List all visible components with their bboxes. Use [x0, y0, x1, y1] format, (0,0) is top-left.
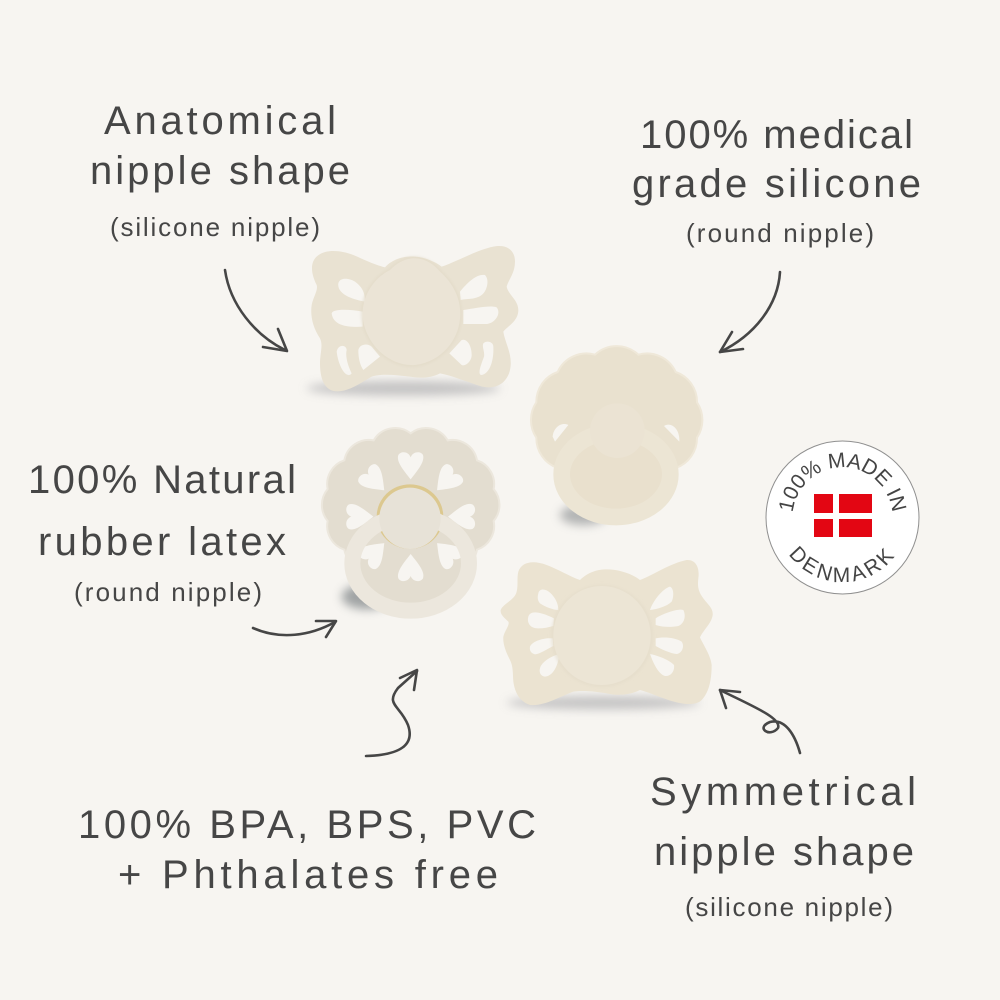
- label: anatomical nipple shape: [90, 99, 350, 242]
- left opening: [553, 424, 568, 442]
- badge top text: 100% MADE IN: [779, 452, 906, 511]
- pacifier: symmetrical wings: [501, 560, 713, 709]
- label: anatomical nipple shape: (silicone nipple): [110, 212, 320, 242]
- label: BPA free: + Phthalates free: [118, 853, 498, 897]
- label: symmetrical nipple shape: [650, 770, 916, 922]
- pacifier: scalloped silicone: [531, 346, 702, 525]
- label: anatomical nipple shape: nipple shape: [90, 149, 350, 193]
- badge: made in Denmark: [766, 440, 920, 594]
- label: anatomical nipple shape: Anatomical: [104, 99, 336, 143]
- label: symmetrical nipple shape: nipple shape: [654, 830, 914, 874]
- label: medical grade silicone: grade silicone: [632, 162, 921, 206]
- label: natural rubber latex: 100% Natural: [28, 458, 296, 502]
- badge bottom text: DENMARK: [789, 546, 895, 582]
- label: symmetrical nipple shape: (silicone nipple): [685, 892, 893, 922]
- arrow: to anatomical pacifier: [225, 270, 287, 351]
- pacifier: latex with hearts: [322, 428, 499, 611]
- label: medical grade silicone: 100% medical: [640, 113, 913, 157]
- Danish flag: [814, 494, 872, 537]
- arrow: to silicone pacifier: [720, 272, 780, 352]
- pacifier: butterfly anatomical: [307, 246, 518, 396]
- right opening: [664, 425, 679, 442]
- label: natural rubber latex: (round nipple): [74, 577, 262, 607]
- label: medical grade silicone: [632, 113, 921, 248]
- arrow: squiggle from BPA text: [366, 670, 417, 756]
- label: natural rubber latex: rubber latex: [38, 520, 286, 564]
- label: symmetrical nipple shape: Symmetrical: [650, 770, 916, 814]
- label: medical grade silicone: (round nipple): [686, 218, 874, 248]
- arrow: squiggle to symmetrical pacifier: [720, 690, 800, 753]
- label: BPA free: 100% BPA, BPS, PVC: [78, 803, 536, 847]
- label: natural rubber latex: [28, 458, 296, 607]
- arrow: to latex pacifier: [253, 621, 336, 637]
- label: BPA free: [78, 803, 536, 897]
